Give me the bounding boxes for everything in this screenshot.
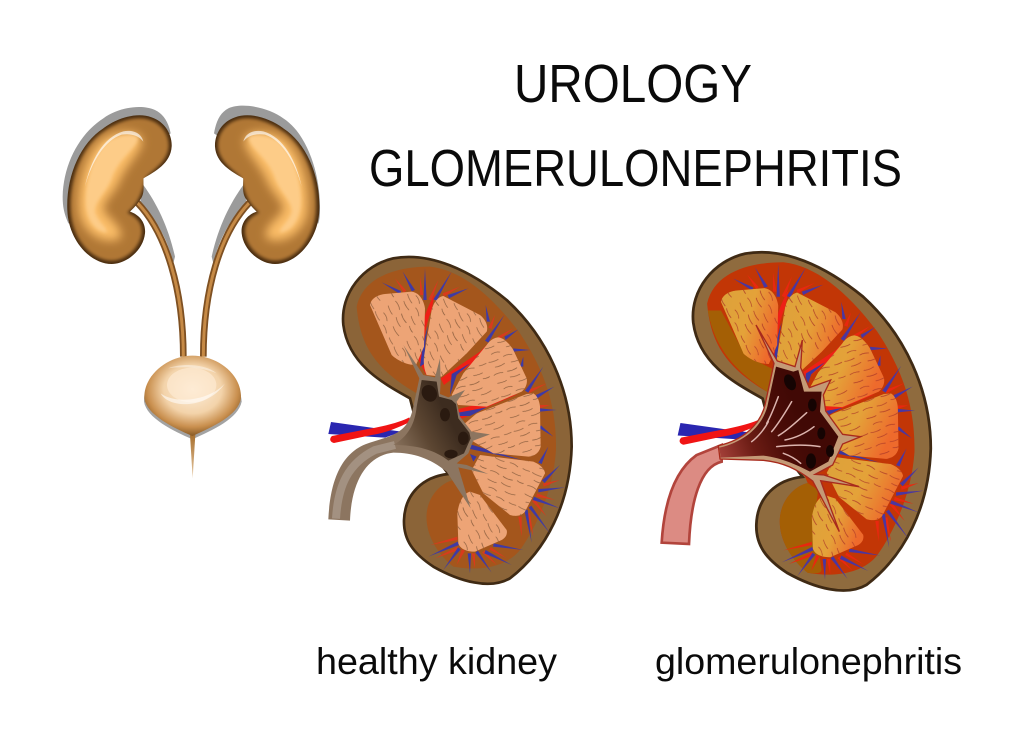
fine red capillaries [747, 273, 919, 574]
label: healthy kidney: healthy kidney [316, 641, 558, 682]
icon: right kidney highlight [243, 131, 302, 187]
renal sinus [393, 380, 471, 461]
icon: left kidney shadow [63, 107, 175, 263]
illustration: healthy kidney [328, 257, 572, 584]
icon: right kidney shadow [212, 106, 320, 263]
white streaks [752, 397, 820, 463]
fine blue capillaries [733, 264, 924, 580]
inflamed pelvis and ureter [662, 325, 861, 544]
icon: left kidney [67, 115, 172, 264]
ureter lighter core [336, 445, 395, 519]
renal pelvis and ureter [328, 345, 490, 521]
fine red capillaries [395, 277, 560, 568]
artery and vein [328, 417, 411, 443]
kidney outer body [343, 257, 572, 584]
pyramid fibres [721, 288, 903, 557]
kidney outer body [693, 252, 931, 591]
icon: right kidney [214, 115, 320, 264]
kidney inner cortex [357, 267, 556, 569]
label: glomerulonephritis: glomerulonephritis [655, 641, 962, 682]
calyx openings [782, 373, 834, 469]
darkened upper zone [708, 311, 780, 393]
title: glomerulonephritis: GLOMERULONEPHRITIS [369, 140, 902, 198]
calyx openings [419, 382, 469, 458]
ureter [662, 445, 722, 544]
icon: left kidney highlight [85, 131, 143, 187]
pelvis dark body [719, 367, 838, 472]
vessels between pyramids [417, 293, 522, 462]
fine blue capillaries [382, 268, 565, 573]
illustration: urinary system [60, 106, 327, 478]
vessels between pyramids [770, 290, 879, 462]
inflamed cortex [707, 262, 914, 575]
icon: bladder [144, 356, 242, 478]
title: urology: UROLOGY [514, 54, 752, 114]
icon: left ureter [137, 203, 183, 357]
pelvis tan border [718, 325, 861, 532]
icon: right ureter [203, 203, 249, 357]
darkened lower zone [780, 483, 822, 573]
illustration: glomerulonephritis kidney [662, 252, 931, 591]
pyramid fibres [370, 292, 545, 552]
renal pyramids [370, 292, 545, 552]
renal pyramids [721, 288, 903, 557]
artery and vein [678, 418, 763, 445]
kidney tissue [678, 252, 931, 591]
